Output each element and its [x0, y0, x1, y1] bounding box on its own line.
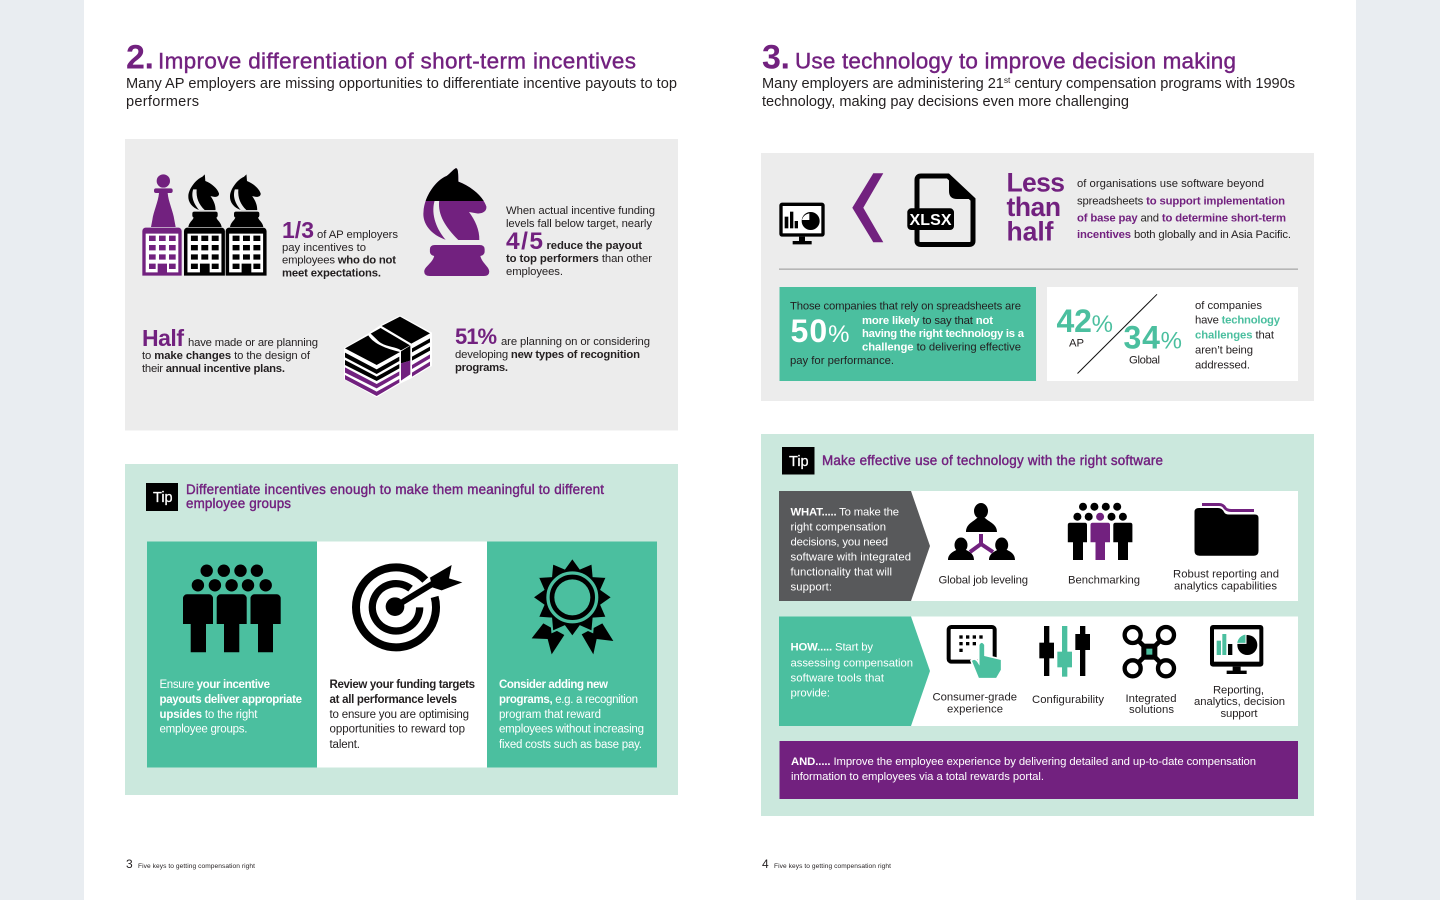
- section intro text: technology: st: [1004, 75, 1011, 85]
- footer: page 4: [762, 857, 891, 871]
- item: consumer-grade experience: experience: [947, 704, 1003, 716]
- card text: program that reward: [499, 709, 601, 721]
- arrow banner: WHAT: right compensation: [790, 521, 886, 533]
- callout: 42% AP and 34% global: AP: [1069, 338, 1084, 350]
- section heading: 2. Improve differentiation: 2.: [126, 38, 154, 76]
- item: robust reporting folder: analytics capabilities: [1174, 581, 1277, 593]
- section intro text: technology: century compensation programs with 1990s: [1010, 76, 1295, 92]
- stat: four fifths reduce the payout: 4/5: [506, 228, 543, 255]
- icon: stack of banknotes: [344, 315, 432, 397]
- card: consider new programs: [487, 542, 657, 768]
- stat heading: Less than half: half: [1006, 216, 1054, 246]
- stat: 51% planning new recognition programs: [455, 324, 650, 374]
- tip heading: [186, 482, 604, 511]
- stat: 51% planning new recognition programs: 51%: [455, 324, 497, 349]
- arrow banner: WHAT: support:: [790, 582, 832, 594]
- item: integrated solutions drone: [1125, 627, 1176, 716]
- arrow banner: WHAT: software with integrated: [790, 552, 911, 564]
- stat: one third of AP employers: meet expectations.: [282, 268, 381, 280]
- section intro text: technology: technology, making pay decisions even more challenging: [762, 94, 1129, 110]
- callout: 50% more likely: 50%: [790, 313, 850, 349]
- stat text: software use: of base pay and to determine short-term: [1077, 212, 1286, 224]
- card text: payouts deliver appropriate: [160, 694, 302, 706]
- row: how to start: [779, 616, 1298, 726]
- card text: to ensure you are optimising: [330, 709, 469, 721]
- callout: 50% more likely: Those companies that rely on spreadsheets are: [790, 300, 1021, 312]
- callout: 50% more likely: pay for performance.: [790, 355, 894, 367]
- card text: Ensure your incentive: [160, 679, 270, 691]
- section intro text: technology: Many employers are administering 21: [762, 76, 1004, 92]
- callout: 42% AP and 34% global: [1047, 287, 1298, 381]
- stat: four fifths reduce the payout: to top performers than other: [506, 253, 652, 265]
- callout: 42% AP and 34% global: 42%: [1056, 303, 1113, 339]
- section heading: 3. Use technology: Use technology to improve decision making: [795, 48, 1236, 74]
- callout: 42% AP and 34% global: aren’t being: [1195, 345, 1253, 357]
- arrow banner: HOW: HOW..... Start by: [790, 642, 873, 654]
- callout: AND total rewards portal: information to employees via a total rewards portal.: [791, 771, 1044, 783]
- stat heading: Less than half: [1006, 168, 1065, 246]
- panel: technology statistics: [761, 153, 1314, 401]
- tip heading: employee groups: [186, 496, 291, 511]
- item: consumer-grade experience: [932, 627, 1017, 716]
- section heading: 2. Improve differentiation: [126, 38, 636, 76]
- card text: programs, e.g. a recognition: [499, 694, 638, 706]
- item: benchmarking: Benchmarking: [1068, 574, 1140, 586]
- stat text: software use: [1077, 178, 1291, 241]
- callout: 50% more likely: more likely to say that not: [862, 315, 993, 327]
- stat: one third of AP employers: pay incentives to: [282, 242, 366, 254]
- item: configurability sliders: [1032, 626, 1104, 706]
- icon: XLSX file: [907, 176, 973, 244]
- icon: monitor with charts: [779, 203, 825, 244]
- arrow banner: WHAT: [779, 491, 930, 601]
- arrow banner: HOW: software tools that: [790, 672, 885, 684]
- stat: four fifths reduce the payout: employees.: [506, 266, 563, 278]
- stat: four fifths reduce the payout: When actual incentive funding: [506, 205, 655, 217]
- card text: at all performance levels: [330, 694, 457, 706]
- card text: upsides to the right: [160, 709, 258, 721]
- icon: large knight chess piece: [423, 168, 489, 276]
- tip badge: Tip: [153, 490, 173, 506]
- section intro text: technology: [762, 75, 1295, 110]
- callout: 42% AP and 34% global: challenges that: [1195, 329, 1275, 341]
- callout: AND total rewards portal: [780, 741, 1298, 799]
- item: global job leveling: Global job leveling: [938, 574, 1028, 586]
- section intro text: short-term incentives: Many AP employers are missing opportunities to differentiate incentive payouts to top: [126, 76, 677, 92]
- panel: tip on using the right software: [761, 434, 1314, 816]
- item: integrated solutions drone: solutions: [1129, 704, 1174, 716]
- card text: Consider adding new: [499, 679, 608, 691]
- footer: page 3: [126, 857, 255, 871]
- card text: talent.: [330, 739, 360, 751]
- tip badge: [146, 483, 178, 511]
- callout: 50% more likely: challenge to delivering effective: [862, 342, 1021, 354]
- card text: opportunities to reward top: [330, 724, 465, 736]
- stat heading: Less than half: than: [1006, 192, 1061, 222]
- footer: page 4: 4: [762, 857, 769, 871]
- card text: [160, 679, 302, 736]
- callout: 42% AP and 34% global: have technology: [1195, 315, 1281, 327]
- item: consumer-grade experience: Consumer-grade: [932, 692, 1017, 704]
- icon: pawn and knights on buildings: [142, 174, 267, 276]
- icon: group of people: [183, 564, 281, 652]
- card text: employee groups.: [160, 724, 248, 736]
- stat: four fifths reduce the payout: levels fall below target, nearly: [506, 218, 652, 230]
- arrow banner: WHAT: functionality that will: [790, 567, 892, 579]
- card text: [499, 679, 644, 751]
- card text: Review your funding targets: [330, 679, 475, 691]
- section heading: 3. Use technology: 3.: [762, 38, 790, 76]
- callout: 42% AP and 34% global: of companies: [1195, 300, 1262, 312]
- item: benchmarking: [1068, 503, 1140, 586]
- stat: four fifths reduce the payout: [506, 205, 655, 278]
- footer: page 4: Five keys to getting compensation right: [774, 863, 891, 870]
- callout: 42% AP and 34% global: Global: [1129, 354, 1160, 366]
- card: review funding targets: [317, 542, 487, 768]
- section intro text: short-term incentives: [126, 76, 677, 110]
- panel: incentive statistics: [125, 139, 678, 430]
- item: reporting analytics monitor: [1194, 625, 1285, 720]
- tip heading: Make effective use of technology with the right software: [822, 453, 1163, 468]
- item: global job leveling: [938, 503, 1028, 586]
- panel: tip on differentiating incentives: [125, 464, 678, 795]
- stat: one third of AP employers: of AP employers: [317, 229, 398, 241]
- item: reporting analytics monitor: support: [1220, 708, 1258, 720]
- tip badge: [782, 447, 814, 474]
- arrow banner: HOW: [779, 616, 930, 726]
- item: robust reporting folder: [1173, 504, 1279, 593]
- callout: AND total rewards portal: AND..... Improve the employee experience by delivering detailed and up-to-date compensation: [791, 756, 1256, 768]
- stat: 51% planning new recognition programs: developing new types of recognition: [455, 349, 640, 361]
- arrow banner: WHAT: WHAT..... To make the: [790, 506, 899, 518]
- stat: four fifths reduce the payout: reduce the payout: [546, 240, 642, 252]
- stat: one third of AP employers: 1/3: [282, 217, 314, 243]
- arrow banner: HOW: assessing compensation: [790, 657, 913, 669]
- item: integrated solutions drone: Integrated: [1126, 693, 1176, 705]
- stat: one third of AP employers: [282, 217, 398, 280]
- icon: target with arrow: [356, 565, 462, 647]
- row: what the software must support: [779, 491, 1298, 601]
- stat: half changing annual incentive plans: their annual incentive plans.: [142, 363, 285, 375]
- card: ensure incentive payouts: [147, 542, 317, 768]
- item: reporting analytics monitor: analytics, decision: [1194, 696, 1285, 708]
- card text: fixed costs such as base pay.: [499, 739, 642, 751]
- item: reporting analytics monitor: Reporting,: [1213, 684, 1264, 696]
- section heading: 3. Use technology: [762, 38, 1236, 76]
- tip badge: Tip: [789, 454, 809, 470]
- stat: one third of AP employers: employees who do not: [282, 254, 396, 266]
- section heading: 2. Improve differentiation: Improve differentiation of short-term incentives: [158, 48, 636, 74]
- stat heading: Less than half: Less: [1006, 168, 1065, 198]
- card text: employees without increasing: [499, 724, 644, 736]
- stat: half changing annual incentive plans: Half: [142, 325, 184, 351]
- section intro text: short-term incentives: performers: [126, 94, 199, 110]
- stat: half changing annual incentive plans: [142, 325, 318, 375]
- arrow banner: WHAT: decisions, you need: [790, 536, 888, 548]
- stat: half changing annual incentive plans: to make changes to the design of: [142, 350, 311, 362]
- callout: 50% more likely: [780, 287, 1036, 381]
- item: configurability sliders: Configurability: [1032, 694, 1104, 706]
- callout: 42% AP and 34% global: 34%: [1124, 320, 1182, 356]
- stat: half changing annual incentive plans: have made or are planning: [188, 337, 318, 349]
- icon: award rosette: [532, 558, 613, 654]
- icon: less-than symbol: [852, 173, 883, 242]
- callout: 42% AP and 34% global: addressed.: [1195, 359, 1250, 371]
- stat text: software use: incentives both globally and in Asia Pacific.: [1077, 229, 1291, 241]
- callout: 50% more likely: having the right technology is a: [862, 328, 1025, 340]
- stat text: software use: spreadsheets to support implementation: [1077, 196, 1285, 208]
- tip heading: Differentiate incentives enough to make them meaningful to different: [186, 482, 604, 497]
- arrow banner: HOW: provide:: [790, 687, 830, 699]
- stat: 51% planning new recognition programs: programs.: [455, 362, 508, 374]
- footer: page 3: 3: [126, 857, 133, 871]
- item: robust reporting folder: Robust reporting and: [1173, 569, 1279, 581]
- icon: XLSX file: XLSX: [910, 212, 952, 229]
- stat text: software use: of organisations use software beyond: [1077, 178, 1264, 190]
- card text: [330, 679, 475, 751]
- footer: page 3: Five keys to getting compensation right: [138, 863, 255, 870]
- stat: 51% planning new recognition programs: are planning on or considering: [501, 336, 650, 348]
